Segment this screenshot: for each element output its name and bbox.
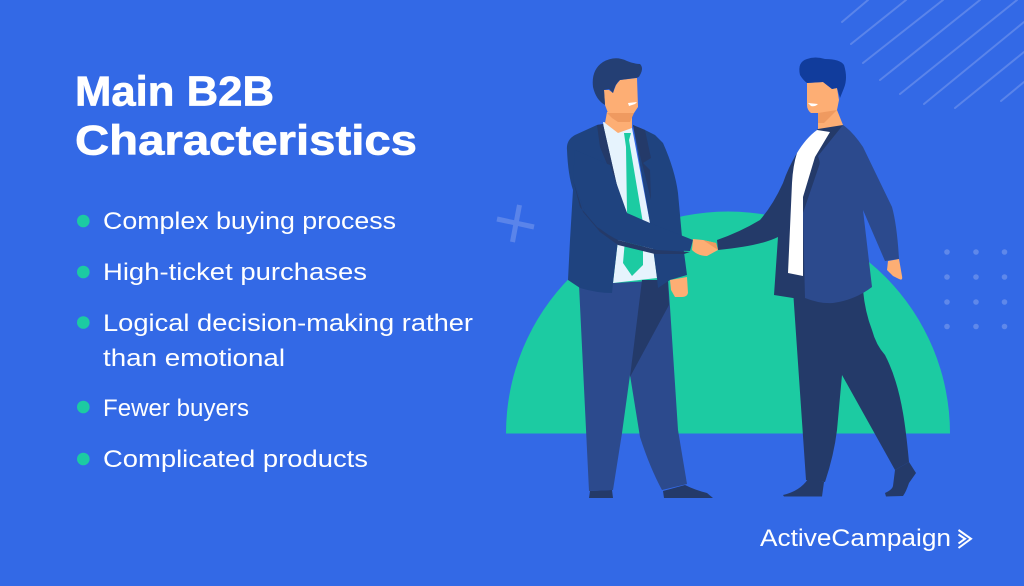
right man white shirt — [788, 130, 830, 276]
right man trousers — [793, 290, 909, 482]
figure: man on left — [567, 58, 718, 498]
bullet list — [77, 208, 473, 473]
right man hair — [799, 58, 846, 98]
left man arm — [573, 150, 693, 251]
left man arm shadow — [573, 180, 690, 254]
title: Main B2B — [75, 68, 274, 114]
title: Characteristics — [75, 116, 417, 164]
title — [75, 68, 417, 164]
right man smile — [808, 103, 818, 106]
bullet: logical decision-making: than emotional — [103, 345, 285, 372]
right man dark jacket and arm — [717, 125, 843, 298]
right man jacket — [803, 125, 899, 303]
green semicircle — [506, 212, 950, 434]
right man shoes — [783, 462, 916, 496]
left man trouser shadow — [630, 280, 669, 377]
left man shoes — [589, 485, 713, 498]
icon: plus sign — [497, 205, 534, 242]
right man neck shadow — [818, 110, 837, 123]
left man tie — [623, 133, 643, 276]
right man hand — [887, 259, 902, 280]
left man jacket left side — [567, 124, 627, 293]
left man smile — [628, 102, 637, 106]
left man shirt — [603, 122, 657, 283]
bullet: complicated products: Complicated products — [103, 446, 368, 473]
left man trousers — [579, 280, 687, 491]
left man neck — [605, 112, 632, 133]
figure: man on right — [717, 58, 916, 496]
left man hair — [593, 58, 642, 105]
bullet: logical decision-making — [77, 310, 473, 372]
left man jacket right side — [633, 125, 687, 288]
decorative diagonal lines — [842, 0, 1024, 108]
bullet: logical decision-making: Logical decision-making rather — [103, 310, 473, 337]
bullet: high-ticket purchases: High-ticket purchases — [103, 259, 367, 286]
bullet: complex buying process: Complex buying process — [103, 208, 396, 235]
bullet: fewer buyers: Fewer buyers — [103, 395, 249, 422]
logo: ActiveCampaign: ActiveCampaign — [760, 525, 951, 552]
left man neck shadow — [607, 113, 634, 122]
left man lapel shadows — [597, 124, 651, 200]
decorative dot grid — [944, 249, 1007, 329]
icon: logo chevron — [958, 530, 971, 548]
right man face — [807, 82, 843, 135]
left man face — [604, 78, 638, 113]
handshake shadow — [703, 240, 718, 250]
handshake — [692, 239, 718, 256]
left man lower hand — [670, 277, 688, 297]
